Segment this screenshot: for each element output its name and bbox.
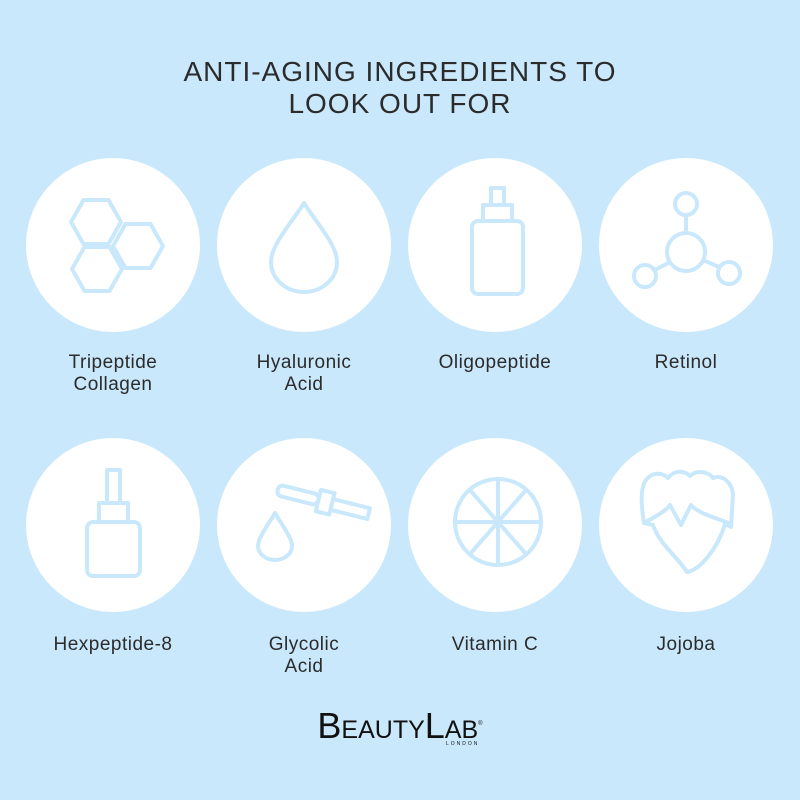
label: Tripeptide Collagen [69, 352, 157, 395]
title [183, 56, 617, 119]
title: ANTI-AGING INGREDIENTS TO [183, 56, 617, 87]
label: Glycolic Acid: Glycolic [269, 634, 339, 655]
logo: BeautyLab® [317, 705, 483, 746]
label: Hexpeptide-8: Hexpeptide-8 [53, 634, 173, 655]
label: Glycolic Acid [269, 634, 339, 677]
label: Retinol: Retinol [655, 352, 717, 373]
logo: LONDON [446, 741, 479, 747]
icon: hexagons (Tripeptide Collagen) [26, 158, 200, 332]
label: Hyaluronic Acid [257, 352, 351, 395]
label: Hyaluronic Acid: Hyaluronic [257, 352, 351, 373]
title: LOOK OUT FOR [288, 88, 512, 119]
label: Glycolic Acid: Acid [285, 656, 323, 677]
icon: water drop (Hyaluronic Acid) [217, 158, 391, 332]
icon: jojoba seed (Jojoba) [599, 438, 773, 612]
icon: citrus slice (Vitamin C) [408, 438, 582, 612]
label: Oligopeptide: Oligopeptide [439, 352, 551, 373]
label: Tripeptide Collagen: Collagen [74, 374, 152, 395]
icon: molecule (Retinol) [599, 158, 773, 332]
icon: dropper bottle (Hexpeptide-8) [26, 438, 200, 612]
icon: spray bottle (Oligopeptide) [408, 158, 582, 332]
icon: pipette with drop (Glycolic Acid) [217, 438, 391, 612]
label: Tripeptide Collagen: Tripeptide [69, 352, 157, 373]
label: Vitamin C: Vitamin C [452, 634, 538, 655]
label: Hyaluronic Acid: Acid [285, 374, 323, 395]
label: Jojoba: Jojoba [656, 634, 716, 655]
